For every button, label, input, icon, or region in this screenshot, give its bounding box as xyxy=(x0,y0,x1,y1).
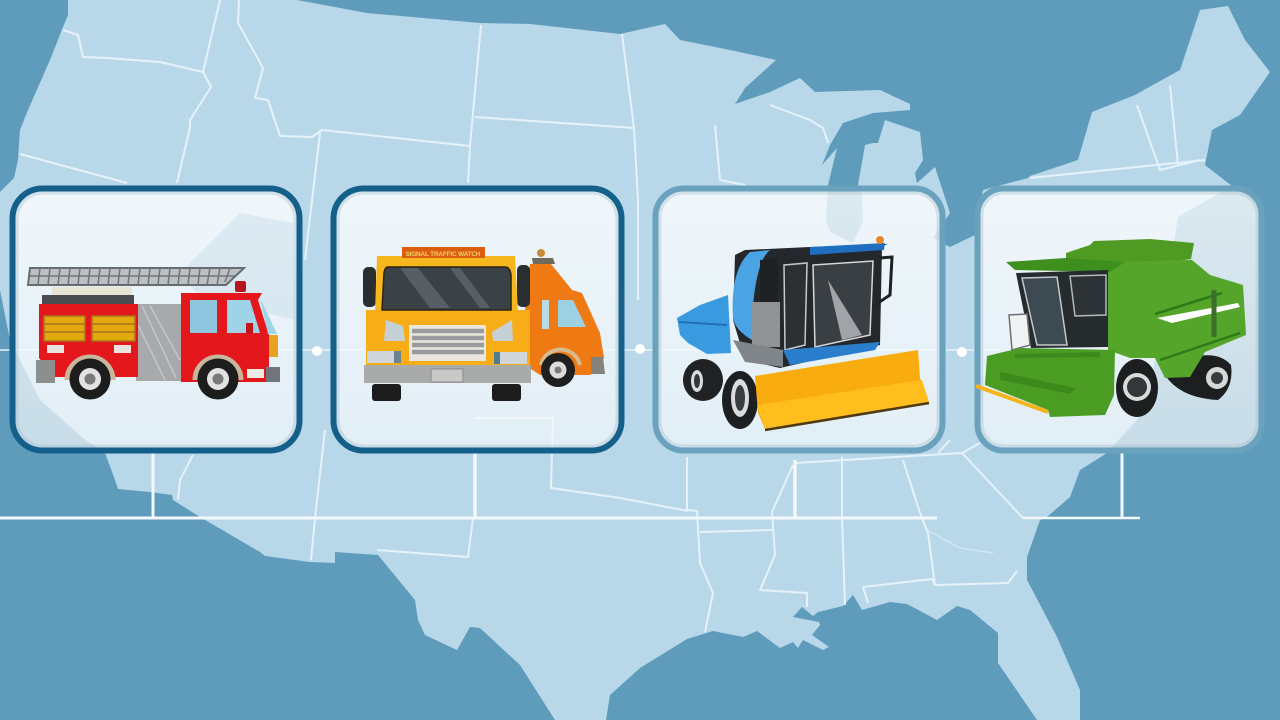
cab xyxy=(1016,270,1108,348)
orange truck wheel xyxy=(541,349,580,387)
rear wheels xyxy=(683,359,723,401)
windshield xyxy=(382,267,511,310)
yellow cutter bar xyxy=(976,386,1048,412)
main body xyxy=(1108,260,1246,378)
hopper top xyxy=(1066,239,1194,270)
wheels xyxy=(67,357,241,400)
rear body xyxy=(39,304,138,377)
blue hopper xyxy=(677,295,731,354)
headlights xyxy=(384,320,405,341)
panel: orange utility truck xyxy=(334,188,622,450)
cab xyxy=(181,293,269,382)
warning sign: SIGNAL TRAFFIC WATCH xyxy=(406,251,481,258)
horizontal rule and connectors xyxy=(0,450,1280,518)
mirrors xyxy=(363,267,376,307)
bumper xyxy=(364,365,531,383)
windows xyxy=(784,263,807,350)
cab body xyxy=(733,244,888,368)
beacon xyxy=(235,281,246,292)
panel: fire truck xyxy=(12,188,300,450)
panel: snow plow xyxy=(656,188,942,450)
warning sign xyxy=(402,247,485,258)
mirror xyxy=(875,257,892,305)
rear wheel xyxy=(1165,355,1231,400)
panel: green combine harvester xyxy=(976,188,1262,450)
icon: green combine harvester xyxy=(976,239,1246,417)
icon: fire truck xyxy=(28,268,280,400)
front tires xyxy=(372,384,401,401)
header xyxy=(985,348,1115,417)
yellow cab xyxy=(375,256,518,312)
yellow shutters xyxy=(44,316,135,341)
icon: blue snow plow xyxy=(677,236,929,430)
icon: yellow and orange truck xyxy=(363,247,605,401)
plow blade xyxy=(755,350,929,430)
front wheel xyxy=(722,371,758,429)
grey pump section xyxy=(136,304,182,381)
grille xyxy=(409,325,486,361)
connector dots xyxy=(312,344,967,357)
front wheel xyxy=(1116,359,1158,417)
roof xyxy=(1006,258,1125,272)
ladder xyxy=(28,268,244,285)
orange side body xyxy=(525,264,604,375)
